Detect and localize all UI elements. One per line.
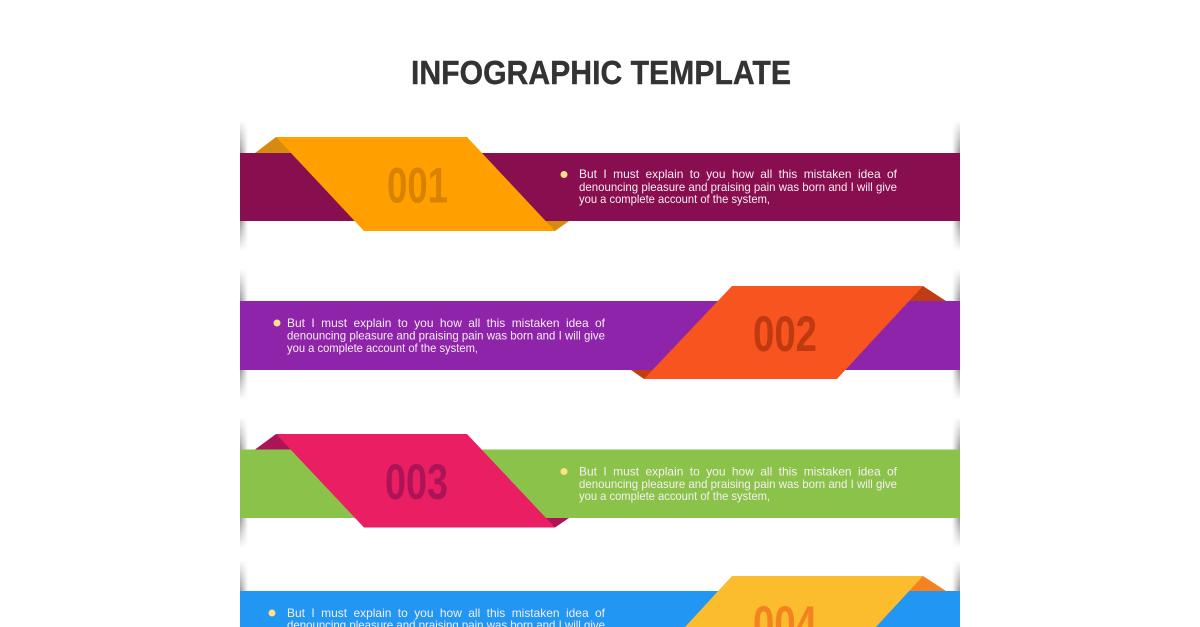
text 002: But I must explain to you how all this mistaken idea of	[287, 317, 606, 330]
ribbon folds 001	[255, 137, 569, 231]
number 002: 002	[753, 306, 817, 362]
text 001: But I must explain to you how all this mistaken idea of	[579, 168, 898, 181]
text 004	[287, 607, 606, 627]
text 004: But I must explain to you how all this mistaken idea of	[287, 607, 606, 620]
ribbon folds 002	[631, 286, 946, 379]
bullet 003	[560, 468, 568, 475]
band 004	[240, 591, 960, 627]
text 002: denouncing pleasure and praising pain was born and I will give	[287, 330, 605, 342]
title: INFOGRAPHIC TEMPLATE	[411, 54, 791, 91]
text 001: you a complete account of the system,	[579, 193, 770, 206]
ribbon 003	[276, 434, 555, 528]
ribbon fold 004	[900, 576, 946, 591]
ribbon 001	[276, 137, 555, 231]
number 001: 001	[387, 158, 448, 214]
bullet 002	[274, 320, 280, 326]
panel: banner 001	[240, 137, 960, 231]
text 001	[579, 168, 898, 206]
text 003: But I must explain to you how all this mistaken idea of	[579, 466, 898, 478]
panel: banner 004	[240, 576, 960, 627]
ribbon folds 003	[255, 434, 569, 528]
panel: banner 003	[240, 434, 960, 528]
edge shadows	[240, 120, 960, 591]
text 003: you a complete account of the system,	[579, 490, 770, 503]
text 002: you a complete account of the system,	[287, 342, 478, 355]
text 001: denouncing pleasure and praising pain was born and I will give	[579, 181, 897, 194]
ribbon 002	[644, 286, 923, 379]
number 003: 003	[385, 454, 448, 510]
band 003	[240, 450, 960, 518]
text 002	[287, 317, 606, 355]
band 001	[240, 153, 960, 221]
text 003: denouncing pleasure and praising pain was born and I will give	[579, 478, 897, 491]
ribbon 004	[685, 576, 923, 627]
bullet 004	[268, 610, 276, 616]
panel: banner 002	[240, 286, 960, 379]
band 002	[240, 301, 960, 370]
bullet 001	[560, 171, 568, 178]
text 003	[579, 466, 898, 503]
